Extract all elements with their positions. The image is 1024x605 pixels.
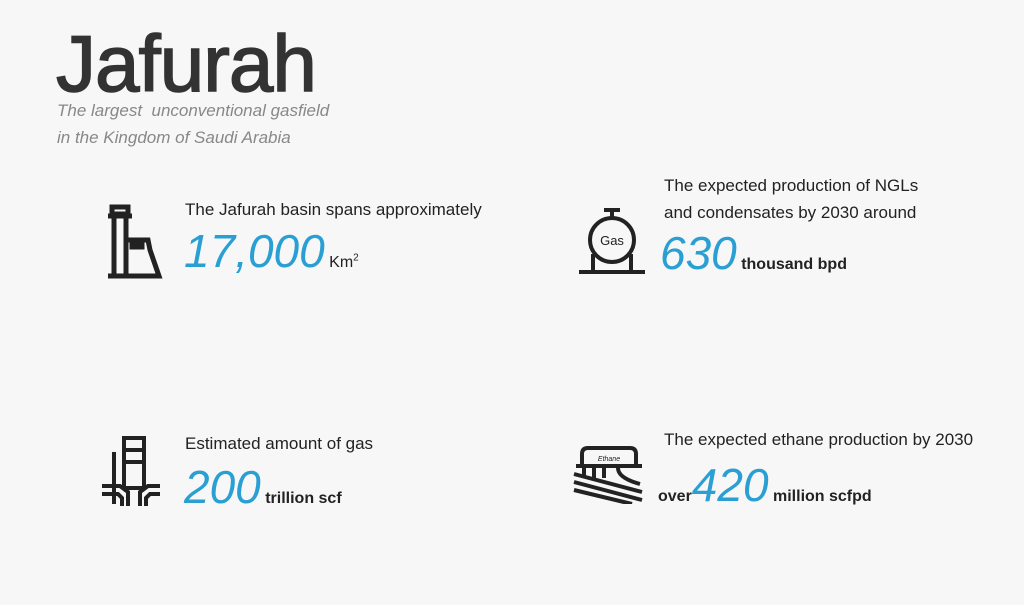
icon: ethane pipeline: Ethane (598, 456, 620, 463)
panel: ethane (574, 430, 973, 511)
panel: NGL production (579, 176, 918, 279)
icon: gas tank (579, 208, 645, 274)
value: over420 million scfpd (658, 459, 872, 511)
value: 17,000 Km2 (184, 225, 359, 277)
icon: tower (108, 204, 162, 278)
text: The Jafurah basin spans approximately (185, 200, 482, 219)
value: 630 thousand bpd (660, 227, 847, 279)
text: The expected production of NGLs (664, 176, 918, 195)
value: 200 trillion scf (184, 461, 342, 513)
subtitle: in the Kingdom of Saudi Arabia (57, 128, 291, 147)
subtitle: The largest unconventional gasfield (57, 101, 329, 120)
text: and condensates by 2030 around (664, 203, 916, 222)
text: Estimated amount of gas (185, 434, 373, 453)
panel: basin area (108, 200, 482, 278)
panel: gas amount (102, 434, 373, 513)
icon: ethane pipeline (574, 446, 642, 504)
text: The expected ethane production by 2030 (664, 430, 973, 449)
title: Jafurah (56, 19, 316, 108)
icon: gas tank: Gas (600, 233, 624, 248)
text (664, 176, 918, 222)
subtitle (57, 101, 330, 147)
icon: rig (102, 436, 160, 506)
